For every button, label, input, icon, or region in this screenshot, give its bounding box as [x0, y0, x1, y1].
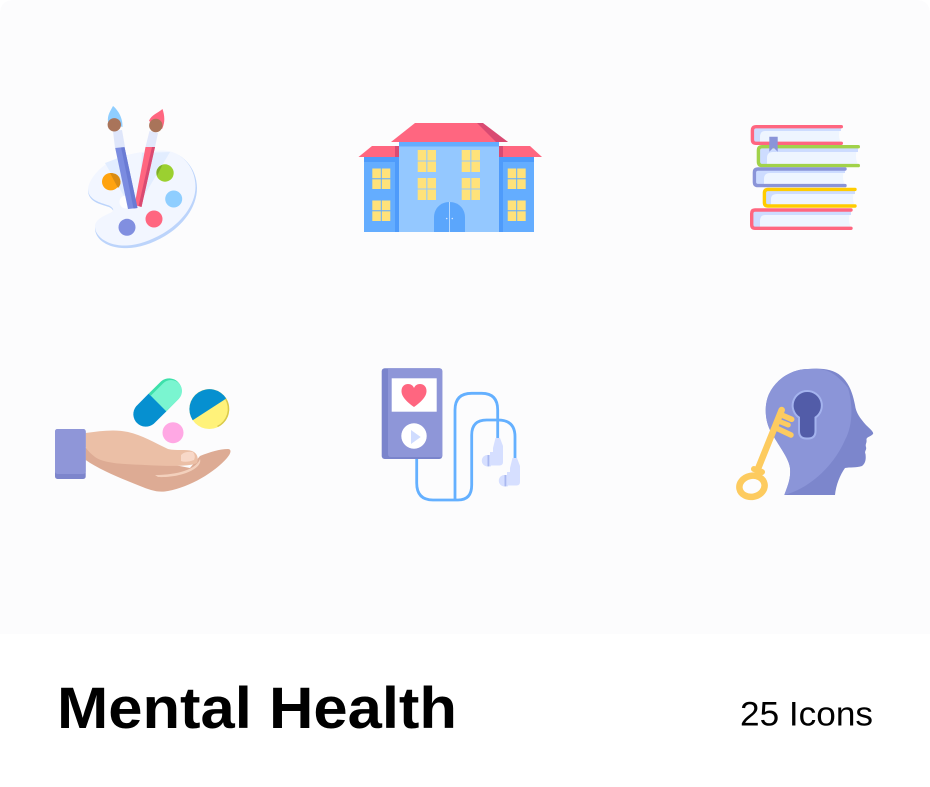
keyhole	[793, 391, 822, 438]
player body	[382, 368, 442, 459]
shirt cuff	[55, 429, 86, 479]
arched door	[434, 202, 465, 232]
icon: building	[358, 123, 542, 232]
paint spots	[102, 164, 182, 236]
palette body	[88, 150, 196, 246]
earphone cables	[417, 393, 515, 500]
book 3	[754, 169, 845, 186]
right brush	[134, 109, 164, 207]
main block	[399, 142, 499, 232]
heart	[402, 384, 426, 407]
upper hand and fingers	[86, 430, 198, 466]
player front	[388, 368, 442, 457]
key	[737, 410, 792, 499]
icon: hand holding pills	[55, 378, 230, 492]
icon: head with keyhole and key	[737, 369, 873, 499]
icon: art palette and brushes	[88, 106, 197, 248]
icon: music player with earphones	[382, 368, 520, 500]
head light side	[766, 369, 851, 495]
book 2	[758, 147, 858, 166]
main block top band	[399, 142, 499, 146]
palette thumb hole	[120, 196, 132, 208]
book 1	[752, 127, 841, 143]
panel: footer	[0, 634, 930, 787]
round pill	[189, 389, 229, 429]
palette rim	[88, 151, 197, 248]
palm	[86, 448, 230, 492]
windows	[372, 150, 526, 221]
main roof	[391, 123, 508, 142]
left wing	[358, 146, 399, 232]
book 5	[752, 210, 851, 228]
play button	[401, 423, 427, 449]
bookmark	[769, 137, 778, 152]
screen	[392, 378, 437, 412]
earbud right	[499, 458, 520, 486]
head profile	[766, 369, 873, 495]
small pink pill	[162, 422, 184, 443]
left brush	[108, 106, 138, 209]
main roof shade	[477, 123, 508, 142]
title: Mental Health	[57, 676, 457, 741]
thumbnail	[181, 452, 195, 462]
earbud left	[482, 438, 503, 466]
icon count: 25 Icons	[740, 696, 873, 734]
brush shadows on palette	[105, 152, 170, 206]
right wing	[499, 146, 542, 232]
palm highlight	[155, 459, 200, 477]
icon: stack of books	[752, 127, 858, 228]
book 4	[764, 189, 855, 206]
capsule	[133, 378, 182, 427]
